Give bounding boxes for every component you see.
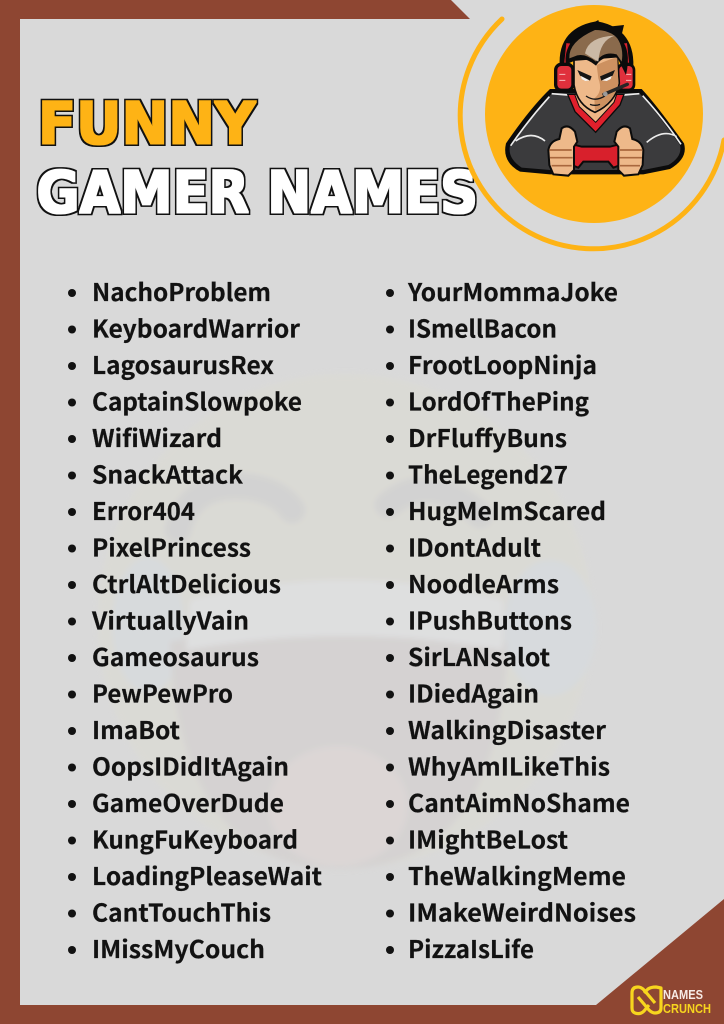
sweater [510, 93, 680, 170]
left name column: IMissMyCouch [92, 930, 265, 965]
yellow circle [485, 5, 703, 223]
right name column: WalkingDisaster [408, 711, 607, 746]
left name column: VirtuallyVain [91, 602, 249, 636]
watermark: laughing emoji [98, 374, 596, 869]
left name column: ImaBot [92, 711, 180, 746]
icon: gamer mascot [505, 20, 685, 176]
headphone band [563, 25, 630, 72]
right name column: CantAimNoShame [408, 784, 630, 819]
right name column: DrFluffyBuns [408, 419, 567, 454]
right name column: IMightBeLost [408, 820, 568, 856]
hair highlight [585, 36, 615, 62]
left name column: LoadingPleaseWait [92, 857, 322, 892]
left fist [548, 126, 577, 176]
right name column: TheLegend27 [408, 456, 568, 490]
left name column [68, 273, 322, 965]
left name column: NachoProblem [92, 273, 271, 308]
right column bullets [386, 289, 394, 954]
eyebrows and eyes [577, 70, 615, 81]
left name column: LagosaurusRex [92, 346, 275, 381]
left name column: CantTouchThis [92, 894, 271, 928]
title line: GAMER NAMES: GAMER NAMES [36, 158, 478, 226]
left name column: KeyboardWarrior [92, 310, 301, 344]
right name column: PizzaIsLife [408, 930, 534, 965]
icon: N mark [632, 987, 661, 1014]
right name column: HugMeImScared [408, 492, 606, 527]
logo text: CRUNCH: CRUNCH [663, 1001, 711, 1016]
left name column: PewPewPro [92, 674, 233, 710]
hair [566, 20, 628, 75]
left name column: OopsIDidItAgain [92, 748, 289, 782]
left name column: CaptainSlowpoke [92, 382, 302, 418]
left name column: Error404 [92, 492, 195, 527]
logo text: NAMES: NAMES [663, 987, 703, 1002]
right name column: FrootLoopNinja [408, 346, 597, 381]
face shadow [594, 58, 618, 111]
title [36, 90, 478, 226]
title line: FUNNY: FUNNY [38, 90, 256, 158]
face [574, 57, 619, 112]
right name column: LordOfThePing [408, 382, 589, 418]
right name column: IPushButtons [408, 602, 572, 636]
left name column: Gameosaurus [92, 638, 259, 673]
right name column: IDiedAgain [408, 674, 539, 710]
yellow ring arc [460, 19, 724, 249]
left name column: GameOverDude [92, 784, 284, 819]
right name column: ISmellBacon [408, 310, 557, 344]
microphone [604, 84, 627, 94]
logo: Names Crunch [632, 987, 711, 1016]
right name column [386, 273, 636, 965]
left name column: KungFuKeyboard [92, 820, 298, 856]
right name column: WhyAmILikeThis [408, 748, 610, 782]
right name column: TheWalkingMeme [408, 857, 626, 892]
left column bullets [68, 289, 76, 954]
left name column: PixelPrincess [92, 528, 251, 564]
controller [572, 144, 621, 168]
left name column: CtrlAltDelicious [92, 565, 281, 600]
sleeve highlights [511, 94, 681, 146]
headphone cups [554, 63, 575, 92]
left name column: WifiWizard [92, 419, 222, 454]
right name column: NoodleArms [408, 565, 559, 600]
body outline [505, 89, 685, 174]
right name column: IMakeWeirdNoises [408, 894, 636, 928]
right fist [614, 126, 643, 176]
right name column: IDontAdult [408, 528, 541, 564]
collar [568, 94, 624, 132]
right name column: YourMommaJoke [407, 273, 618, 308]
finger lines [549, 150, 642, 166]
left name column: SnackAttack [92, 456, 244, 490]
right name column: SirLANsalot [408, 638, 550, 673]
mouth [586, 96, 605, 105]
